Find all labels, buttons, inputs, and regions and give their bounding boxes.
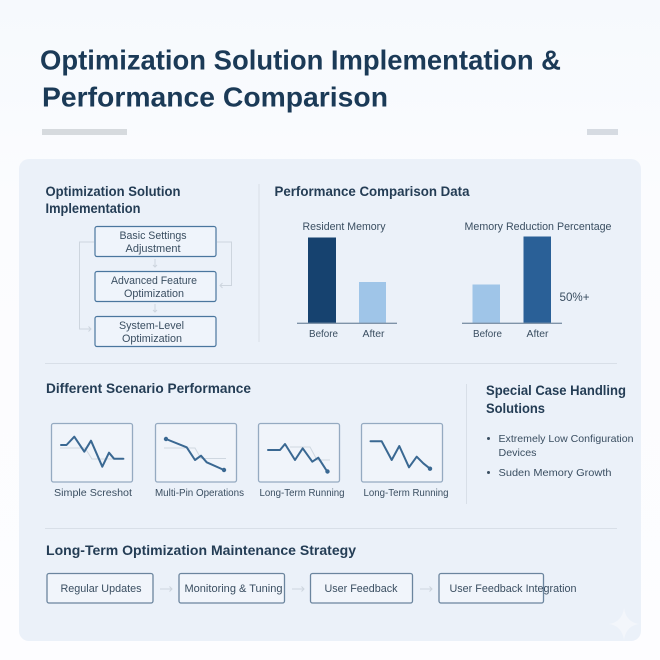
heading: scenario performance: Different Scenario Performance bbox=[46, 380, 251, 396]
bar chart: memory reduction percentage: Before bbox=[473, 328, 502, 340]
box: system-level: Optimization bbox=[122, 333, 182, 345]
bar chart: resident memory: After bbox=[362, 328, 385, 340]
step: user feedback integration bbox=[439, 574, 576, 603]
heading: optimization solution bbox=[46, 183, 180, 216]
title bbox=[40, 44, 561, 112]
panel: performance comparison bbox=[274, 183, 612, 340]
heading: performance comparison: Performance Comparison Data bbox=[274, 183, 470, 199]
main panel bbox=[19, 159, 641, 641]
title: Optimization Solution Implementation & bbox=[40, 44, 561, 76]
arrow bbox=[420, 586, 432, 592]
panel: long-term maintenance strategy bbox=[46, 542, 576, 603]
step: regular updates: Regular Updates bbox=[60, 583, 142, 595]
bar chart: resident memory: Before bbox=[309, 328, 338, 340]
bar chart: memory reduction percentage: Memory Reduction Percentage bbox=[464, 221, 612, 233]
box: basic settings: Basic Settings bbox=[120, 230, 187, 242]
card: long-term running 1: Long-Term Running bbox=[260, 487, 345, 499]
title accent bars bbox=[42, 129, 618, 135]
heading: optimization solution: Implementation bbox=[46, 200, 140, 216]
box: advanced feature: Optimization bbox=[124, 288, 184, 300]
panel: different scenario performance bbox=[46, 380, 449, 499]
box: system-level bbox=[95, 316, 216, 346]
heading: special case: Solutions bbox=[486, 400, 545, 416]
icon: sparkle bbox=[609, 608, 639, 640]
panel: optimization solution implementation bbox=[46, 183, 232, 346]
bar chart: resident memory: Resident Memory bbox=[302, 221, 386, 233]
step: regular updates bbox=[47, 574, 153, 603]
step: monitoring and tuning: Monitoring & Tuning bbox=[184, 583, 282, 595]
box: system-level: System-Level bbox=[119, 320, 184, 332]
step: user feedback: User Feedback bbox=[324, 583, 398, 595]
title: Performance Comparison bbox=[42, 82, 388, 112]
card: multi-pin operations bbox=[155, 424, 244, 499]
heading: maintenance strategy: Long-Term Optimization Maintenance Strategy bbox=[46, 542, 356, 558]
step: user feedback bbox=[310, 574, 412, 603]
step: monitoring and tuning bbox=[179, 574, 284, 603]
box: advanced feature: Advanced Feature bbox=[111, 275, 197, 287]
step: user feedback integration: User Feedback Integration bbox=[450, 583, 576, 595]
heading: optimization solution: Optimization Solution bbox=[46, 183, 180, 199]
bullet list: Suden Memory Growth bbox=[498, 467, 612, 479]
panel: special case handling bbox=[486, 382, 634, 479]
bar chart: memory reduction percentage bbox=[462, 221, 612, 340]
bar chart: resident memory bbox=[297, 221, 397, 340]
card: long-term running 2: Long-Term Running bbox=[364, 487, 449, 499]
card: long-term running 2 bbox=[362, 424, 449, 499]
box: basic settings: Adjustment bbox=[126, 243, 180, 255]
bullet list: Devices bbox=[498, 447, 536, 459]
card: multi-pin operations: Multi-Pin Operations bbox=[155, 487, 244, 499]
flow connectors bbox=[80, 242, 232, 332]
card: simple screenshot bbox=[52, 424, 132, 499]
card: long-term running 1 bbox=[258, 424, 345, 499]
bullet list bbox=[487, 433, 634, 479]
card: simple screenshot: Simple Screshot bbox=[54, 487, 132, 499]
heading: special case: Special Case Handling bbox=[486, 382, 626, 398]
value label: 50%+: 50%+ bbox=[560, 290, 590, 304]
box: advanced feature bbox=[95, 272, 216, 302]
arrow bbox=[292, 586, 304, 592]
heading: special case bbox=[486, 382, 626, 416]
arrow bbox=[160, 586, 172, 592]
box: basic settings bbox=[95, 226, 216, 256]
bar chart: memory reduction percentage: After bbox=[526, 328, 549, 340]
bullet list: Extremely Low Configuration bbox=[498, 433, 634, 445]
